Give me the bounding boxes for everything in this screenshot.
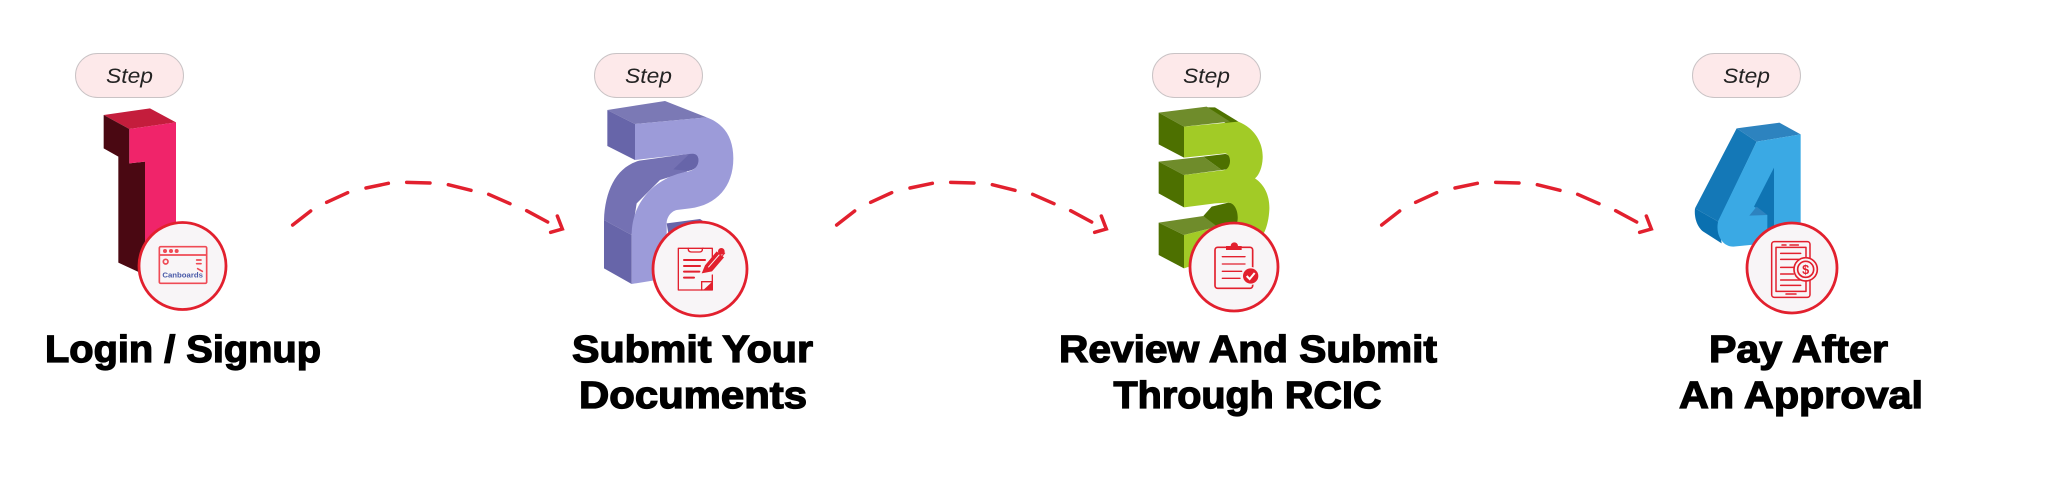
arrow 1 to 2 <box>293 182 562 232</box>
numeral 2 <box>604 101 733 284</box>
heading 3: Through RCIC <box>1114 375 1382 417</box>
numeral 3 <box>1159 107 1269 268</box>
step pill 2 <box>594 54 702 98</box>
numeral 4 <box>1695 123 1801 247</box>
icon badge: invoice tablet with dollar <box>1747 223 1837 313</box>
step pill 2: Step <box>625 65 672 88</box>
step pill 4: Step <box>1723 65 1770 88</box>
icon badge: browser login <box>139 222 226 310</box>
heading 2: Submit Your <box>572 329 813 371</box>
numeral 1 <box>104 108 176 275</box>
heading 2: Documents <box>579 375 807 417</box>
step pill 3: Step <box>1183 65 1230 88</box>
heading 3: Review And Submit <box>1059 329 1437 371</box>
icon badge: browser login: Canboards <box>162 270 203 279</box>
panel: step 3 <box>1059 54 1437 417</box>
step pill 1 <box>76 54 184 98</box>
step pill 3 <box>1152 54 1260 98</box>
heading 1: Login / Signup <box>45 329 321 371</box>
step pill 1: Step <box>106 65 153 88</box>
heading 2 <box>572 329 813 417</box>
panel: step 1 <box>45 54 321 371</box>
arrow 3 to 4 <box>1382 182 1651 232</box>
heading 4: An Approval <box>1679 375 1923 417</box>
heading 4: Pay After <box>1709 329 1888 371</box>
arrow 2 to 3 <box>837 182 1106 232</box>
panel: step 4 <box>1679 54 1923 417</box>
heading 3 <box>1059 329 1437 417</box>
icon badge: invoice tablet with dollar: $ <box>1802 263 1809 277</box>
panel: step 2 <box>572 54 813 417</box>
icon badge: clipboard with check <box>1190 223 1278 311</box>
icon badge: document with pen <box>653 222 747 316</box>
step pill 4 <box>1692 54 1800 98</box>
heading 4 <box>1679 329 1923 417</box>
